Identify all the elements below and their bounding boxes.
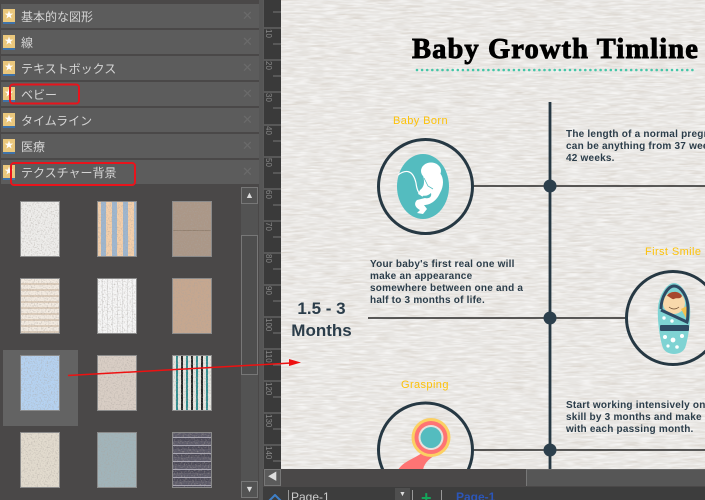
red box: texture background	[11, 163, 135, 185]
thumbnail: light blue	[20, 355, 60, 411]
scroll down button	[241, 481, 258, 498]
ruler: 20	[264, 61, 273, 70]
ruler: 120	[264, 382, 273, 396]
thumbnail: blue grey	[97, 432, 137, 488]
ruler: 70	[264, 222, 273, 231]
text: first smile description	[370, 259, 523, 306]
thumbnail: speckled white	[20, 201, 60, 257]
scroll up button: ▲	[245, 190, 254, 200]
horizontal scrollbar	[263, 469, 705, 487]
panel: left library sidebar	[0, 0, 263, 500]
library row: texture backgrounds: テクスチャー背景	[21, 166, 117, 180]
thumbnail: dark striped	[172, 432, 212, 488]
library row: timeline: ✕	[242, 112, 253, 127]
text: pregnancy length	[566, 129, 705, 164]
ruler: 100	[264, 318, 273, 332]
scroll down button: ▼	[245, 484, 254, 494]
library row: texture backgrounds: ✕	[242, 164, 253, 179]
library row: medical: ★	[4, 140, 14, 150]
red box: baby	[10, 84, 79, 104]
scroll left button: ◀	[268, 472, 278, 483]
icon: fetus	[378, 140, 472, 234]
library row: timeline: タイムライン	[21, 114, 92, 128]
selector end divider	[412, 490, 413, 500]
title: Baby Growth Timline	[412, 34, 699, 65]
thumbnail: ivory	[20, 432, 60, 488]
library row: lines	[1, 30, 259, 54]
library row: baby	[1, 82, 259, 106]
label: First Smile: First Smile	[645, 246, 701, 258]
icon: swaddled baby	[626, 272, 705, 364]
tab divider	[441, 490, 442, 500]
library row: lines: 線	[21, 36, 33, 50]
thumbnail: beige	[97, 355, 137, 411]
library row: basic shapes: ★	[4, 10, 14, 20]
age label	[291, 299, 352, 340]
selected thumbnail highlight	[3, 350, 78, 426]
library row: text boxes	[1, 56, 259, 80]
library row: text boxes: テキストボックス	[21, 62, 116, 76]
library row: basic shapes	[1, 4, 259, 28]
thumbnail: tan wood	[172, 278, 212, 334]
library row: basic shapes: ✕	[242, 8, 253, 23]
timeline chart	[368, 68, 705, 469]
text: grasping description	[566, 400, 705, 435]
ruler: 140	[264, 446, 273, 460]
thumbnail noise overlay	[21, 202, 211, 487]
scroll up button	[241, 187, 258, 204]
library row: baby: ★	[4, 88, 14, 98]
text: first smile description: Your baby's first real one will	[370, 259, 515, 270]
red arrow	[68, 359, 301, 376]
text: pregnancy length: 42 weeks.	[566, 153, 615, 164]
library row: texture backgrounds	[1, 160, 259, 184]
library row: medical: 医療	[21, 140, 45, 154]
ruler: 30	[264, 93, 273, 102]
library row: medical: ✕	[242, 138, 253, 153]
selector dropdown	[395, 488, 410, 500]
thumbnail: blue and peach stripes	[97, 201, 137, 257]
library row: baby: ベビー	[21, 88, 57, 102]
text: first smile description: half to 3 months of life.	[370, 295, 485, 306]
ruler: 50	[264, 158, 273, 167]
scroll left button	[264, 469, 281, 486]
library row: medical	[1, 134, 259, 158]
title underline	[417, 69, 697, 71]
library row: basic shapes: 基本的な図形	[21, 10, 93, 24]
library row: timeline	[1, 108, 259, 132]
label: Baby Born: Baby Born	[393, 115, 448, 127]
ruler: 110	[264, 350, 273, 363]
ruler: 90	[264, 286, 273, 295]
library row: texture backgrounds: ★	[4, 166, 14, 176]
label: Grasping: Grasping	[401, 379, 449, 391]
sidebar edge strip	[259, 0, 263, 500]
library row: baby: ✕	[242, 86, 253, 101]
scrollbar	[241, 187, 258, 498]
thumbnail: teal and black pattern	[172, 355, 212, 411]
page up chevron	[268, 494, 282, 500]
icon: rattle	[378, 403, 472, 497]
ruler	[263, 0, 281, 469]
library row: lines: ✕	[242, 34, 253, 49]
ruler: 80	[264, 254, 273, 263]
ruler: 130	[264, 414, 273, 428]
library row: lines: ★	[4, 36, 14, 46]
selector dropdown: ▼	[399, 491, 406, 498]
bottom page bar	[263, 487, 705, 500]
text: first smile description: make an appearance	[370, 271, 472, 282]
page selector	[288, 490, 411, 500]
canvas: textured background	[281, 0, 705, 469]
ruler: 60	[264, 190, 273, 199]
thumbnail: white stripes	[97, 278, 137, 334]
library row: text boxes: ★	[4, 62, 14, 72]
ruler: 10	[264, 29, 273, 38]
scroll track thumb	[526, 469, 705, 486]
thumbnail: brown planks	[172, 201, 212, 257]
library row: timeline: ★	[4, 114, 14, 124]
library row: text boxes: ✕	[242, 60, 253, 75]
ruler: 40	[264, 126, 273, 135]
text: grasping description: with each passing month.	[566, 424, 694, 435]
text: first smile description: somewhere between one and a	[370, 283, 523, 294]
age label: 1.5 - 3	[297, 299, 346, 318]
scroll thumb	[241, 235, 258, 375]
age label: Months	[291, 320, 352, 340]
thumbnail: cream lines	[20, 278, 60, 334]
